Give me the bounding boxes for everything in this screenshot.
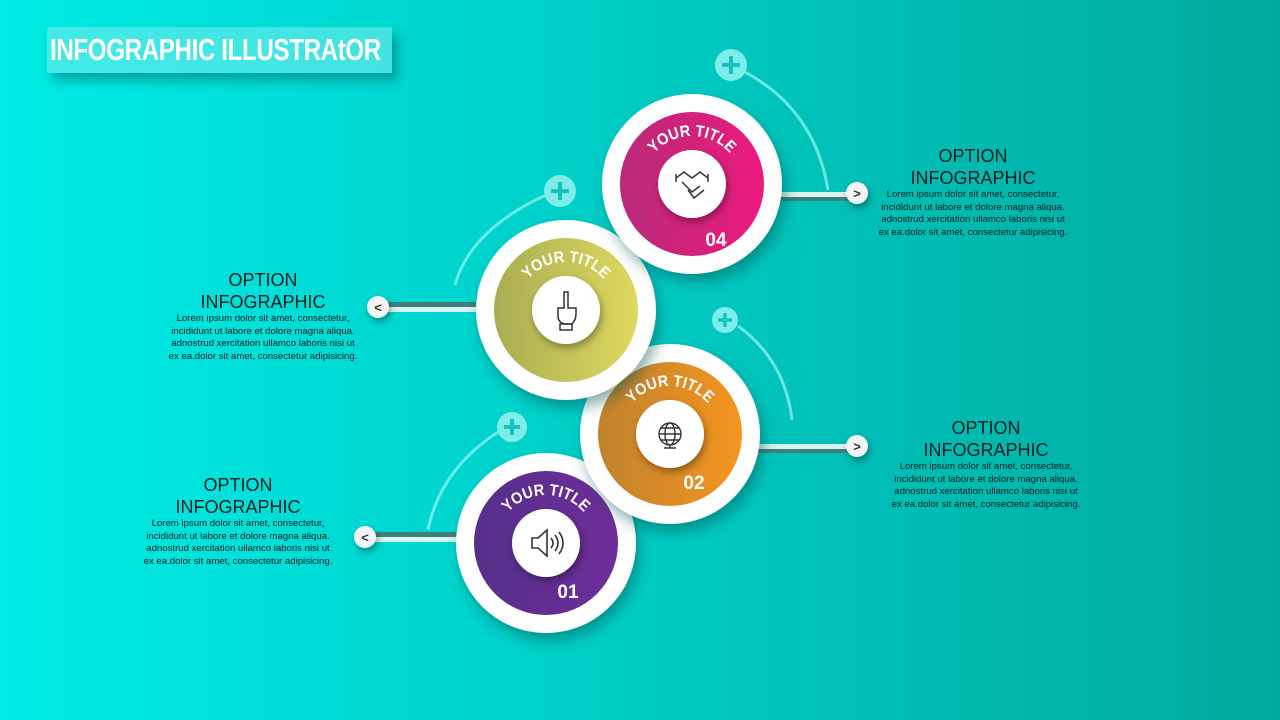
text block: option 01: adnostrud xercitation ullamco laboris nisi ut bbox=[146, 543, 330, 554]
text block: option 02: INFOGRAPHIC bbox=[923, 440, 1048, 460]
circle 02 orange: YOUR TITLE bbox=[624, 375, 715, 403]
circle 01 purple: 01 bbox=[557, 582, 579, 603]
circle 04 pink: YOUR TITLE bbox=[646, 125, 737, 153]
text block: option 04: incididunt ut labore et dolore magna aliqua. bbox=[881, 202, 1065, 213]
plus icons bbox=[497, 49, 747, 442]
text block: option 03 bbox=[169, 270, 357, 362]
text block: option 02 bbox=[892, 418, 1080, 510]
text block: option 03: ex ea.dolor sit amet, consectetur adipisicing. bbox=[169, 351, 357, 362]
circle 04 pink bbox=[599, 94, 794, 289]
text block: option 01: Lorem ipsum dolor sit amet, consectetur, bbox=[152, 518, 324, 529]
text block: option 04: OPTION bbox=[938, 146, 1008, 166]
text block: option 04: Lorem ipsum dolor sit amet, consectetur, bbox=[887, 189, 1059, 200]
text block: option 03: OPTION bbox=[228, 270, 298, 290]
text block: option 02: OPTION bbox=[951, 418, 1020, 438]
circle 04 pink: 04 bbox=[705, 230, 727, 251]
text block: option 03: incididunt ut labore et dolore magna aliqua. bbox=[171, 326, 355, 337]
connector bars and arrows bbox=[354, 182, 868, 548]
circle 01 purple bbox=[452, 453, 647, 648]
text block: option 03: adnostrud xercitation ullamco laboris nisi ut bbox=[171, 338, 355, 349]
icon: handshake bbox=[676, 172, 708, 198]
text block: option 02: ex ea.dolor sit amet, consectetur adipisicing. bbox=[892, 499, 1080, 510]
text block: option 01: ex ea.dolor sit amet, consectetur adipisicing. bbox=[144, 556, 332, 567]
text block: option 03: INFOGRAPHIC bbox=[200, 292, 326, 312]
text block: option 02: incididunt ut labore et dolore magna aliqua. bbox=[894, 474, 1078, 485]
text block: option 01: incididunt ut labore et dolore magna aliqua. bbox=[146, 531, 330, 542]
circle 01 purple: YOUR TITLE bbox=[500, 484, 591, 512]
circle 03 yellow: YOUR TITLE bbox=[520, 251, 611, 279]
circle 03 yellow bbox=[472, 220, 667, 416]
icon: globe bbox=[659, 423, 681, 448]
icon: pointing hand bbox=[558, 292, 576, 330]
text block: option 04: adnostrud xercitation ullamco laboris nisi ut bbox=[881, 214, 1065, 225]
text block: option 04: INFOGRAPHIC bbox=[910, 168, 1036, 188]
connector bars and arrows: > bbox=[853, 186, 861, 201]
connector bars and arrows: < bbox=[374, 300, 382, 315]
title: INFOGRAPHIC ILLUSTRAtOR bbox=[50, 32, 381, 67]
text block: option 02: adnostrud xercitation ullamco laboris nisi ut bbox=[894, 486, 1078, 497]
text block: option 03: Lorem ipsum dolor sit amet, consectetur, bbox=[177, 313, 349, 324]
circle 02 orange bbox=[576, 344, 772, 539]
text block: option 04 bbox=[879, 146, 1067, 238]
connector bars and arrows: < bbox=[361, 530, 369, 545]
text block: option 02: Lorem ipsum dolor sit amet, consectetur, bbox=[900, 461, 1072, 472]
circle 02 orange: 02 bbox=[683, 473, 705, 494]
text block: option 01 bbox=[144, 475, 332, 567]
text block: option 01: OPTION bbox=[203, 475, 272, 495]
icon: speaker bbox=[532, 530, 563, 556]
text block: option 01: INFOGRAPHIC bbox=[175, 497, 300, 517]
connector arcs bbox=[428, 72, 828, 530]
connector bars and arrows: > bbox=[853, 439, 861, 454]
text block: option 04: ex ea.dolor sit amet, consectetur adipisicing. bbox=[879, 227, 1067, 238]
